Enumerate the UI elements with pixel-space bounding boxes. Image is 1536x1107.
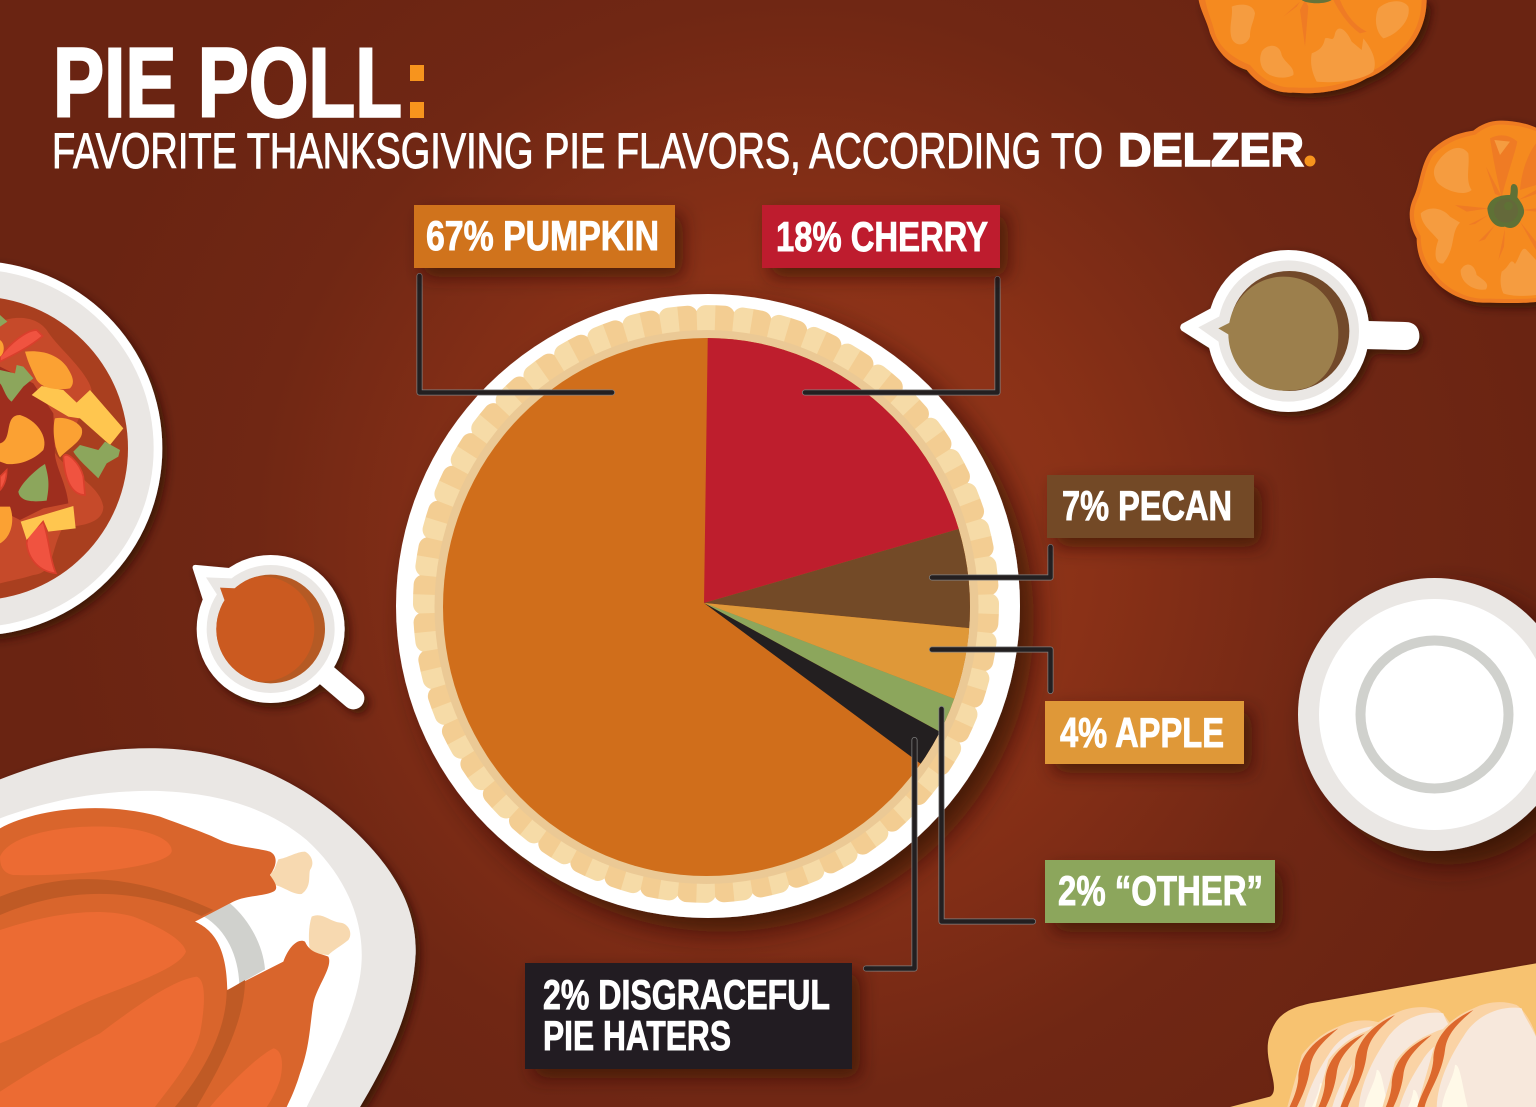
- label: pumpkin: [414, 205, 675, 268]
- label: disgraceful pie haters: [525, 963, 852, 1069]
- pumpkin right: [1410, 121, 1536, 303]
- leader line: cherry: [805, 279, 998, 392]
- label: disgraceful pie haters: PIE HATERS: [543, 1012, 731, 1059]
- label: other: [1045, 860, 1275, 923]
- leader line: pecan: [932, 547, 1050, 578]
- pumpkin top: [1198, 0, 1427, 93]
- turkey highlights: [0, 826, 282, 1107]
- other slice 2%: [704, 603, 954, 731]
- soup broth: [0, 318, 103, 583]
- pumpkin slice 67%: [443, 338, 970, 876]
- label: disgraceful pie haters: 2% DISGRACEFUL: [543, 971, 830, 1018]
- label: pecan: [1047, 475, 1254, 538]
- soup squash: [0, 340, 82, 543]
- delzer logo: DELZER: [1118, 123, 1304, 176]
- apple slice 4%: [704, 603, 969, 698]
- pie crust rim: [434, 330, 978, 884]
- turkey bones: [270, 852, 350, 955]
- title: PIE POLL: [53, 28, 402, 138]
- pie chart: [396, 294, 1020, 918]
- dinner plate: [1298, 578, 1536, 851]
- soup peppers: [0, 330, 85, 573]
- turkey body: [0, 808, 329, 1107]
- label: apple: 4% APPLE: [1060, 709, 1224, 756]
- turkey shading: [0, 879, 245, 1107]
- leader line: haters: [866, 740, 914, 968]
- pumpkin right highlights: [1421, 140, 1536, 296]
- label: pecan: 7% PECAN: [1062, 482, 1232, 529]
- label: cherry: 18% CHERRY: [776, 213, 988, 260]
- label: pumpkin: 67% PUMPKIN: [426, 212, 659, 259]
- pumpkin top stem: [1302, 0, 1332, 3]
- pumpkin top creases: [1283, 0, 1367, 47]
- leader line: other: [942, 709, 1033, 922]
- label: apple: [1045, 701, 1244, 764]
- pie plate: [396, 294, 1020, 918]
- pecan slice 7%: [704, 529, 970, 628]
- soup carrots: [21, 386, 123, 540]
- gravy boat: [193, 555, 353, 703]
- pumpkin right creases: [1455, 135, 1536, 260]
- pumpkin top highlights: [1230, 1, 1409, 82]
- turkey platter: [0, 748, 416, 1107]
- haters slice 2%: [704, 603, 938, 764]
- subtitle: FAVORITE THANKSGIVING PIE FLAVORS, ACCORDING TO: [52, 123, 1103, 179]
- label: cherry: [762, 205, 1000, 268]
- label: other: 2% “OTHER”: [1058, 867, 1263, 914]
- coffee jug: [1180, 250, 1419, 412]
- soup greens: [0, 315, 120, 501]
- cutting board with sliced turkey: [1230, 963, 1536, 1107]
- cherry slice 18%: [704, 338, 959, 603]
- pie crust: [406, 298, 1006, 910]
- pumpkin stem: [1487, 184, 1524, 228]
- turkey string: [204, 903, 265, 984]
- leader line: apple: [932, 650, 1050, 691]
- soup bowl: [0, 261, 162, 636]
- title colon: [410, 65, 424, 118]
- leader line: pumpkin: [420, 276, 612, 392]
